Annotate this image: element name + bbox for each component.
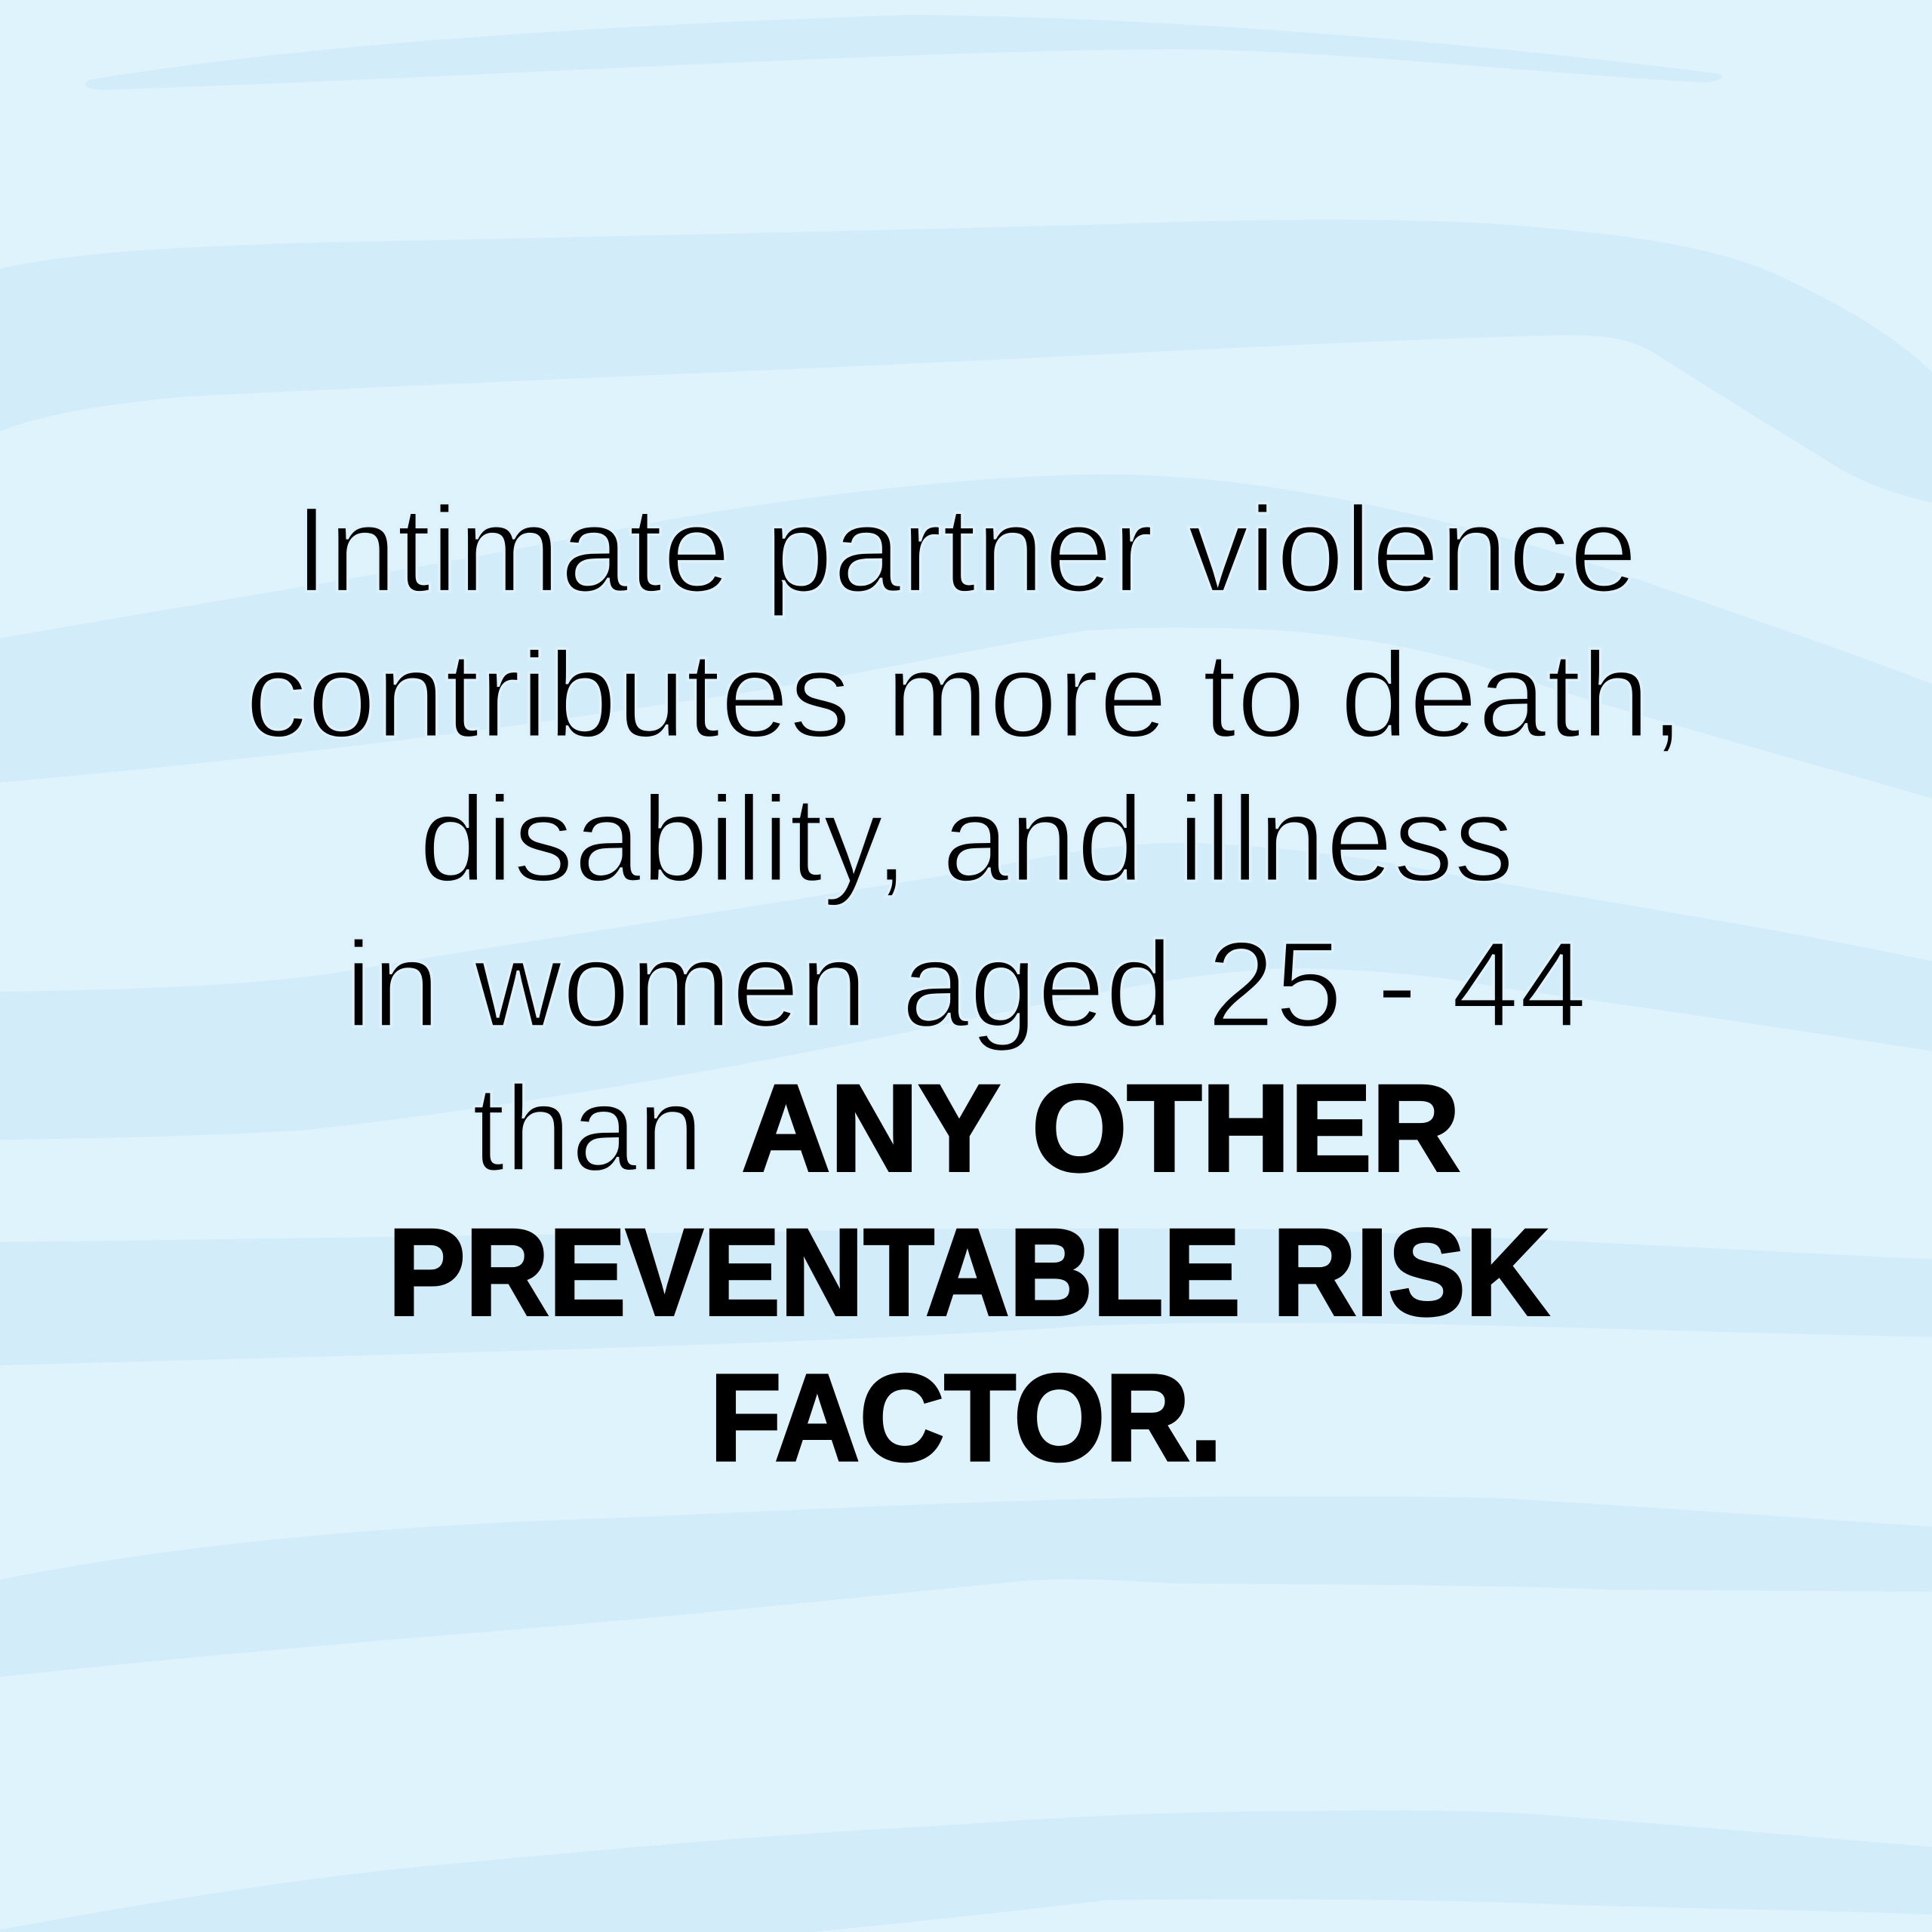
band 2 xyxy=(0,220,1932,503)
line 1: Intimate partner violence xyxy=(294,482,1638,618)
band 3 xyxy=(0,475,1932,798)
band 4 xyxy=(0,843,1932,1140)
line 3: disability, and illness xyxy=(419,771,1515,907)
line 4: in women aged 25 - 44 xyxy=(345,917,1587,1053)
line 7: factor: FACTOR. xyxy=(709,1349,1223,1487)
band 7 xyxy=(0,1810,1932,1932)
line 5: any other: ANY OTHER xyxy=(742,1059,1460,1197)
line 5: than: than xyxy=(472,1061,703,1197)
line 2: contributes more to death, xyxy=(245,627,1684,763)
main statement text xyxy=(245,482,1684,1487)
band 5 xyxy=(0,1229,1932,1365)
band 6 xyxy=(0,1497,1932,1677)
band 1: thin top stroke xyxy=(85,15,1722,90)
line 6: preventable risk: PREVENTABLE RISK xyxy=(388,1203,1549,1341)
